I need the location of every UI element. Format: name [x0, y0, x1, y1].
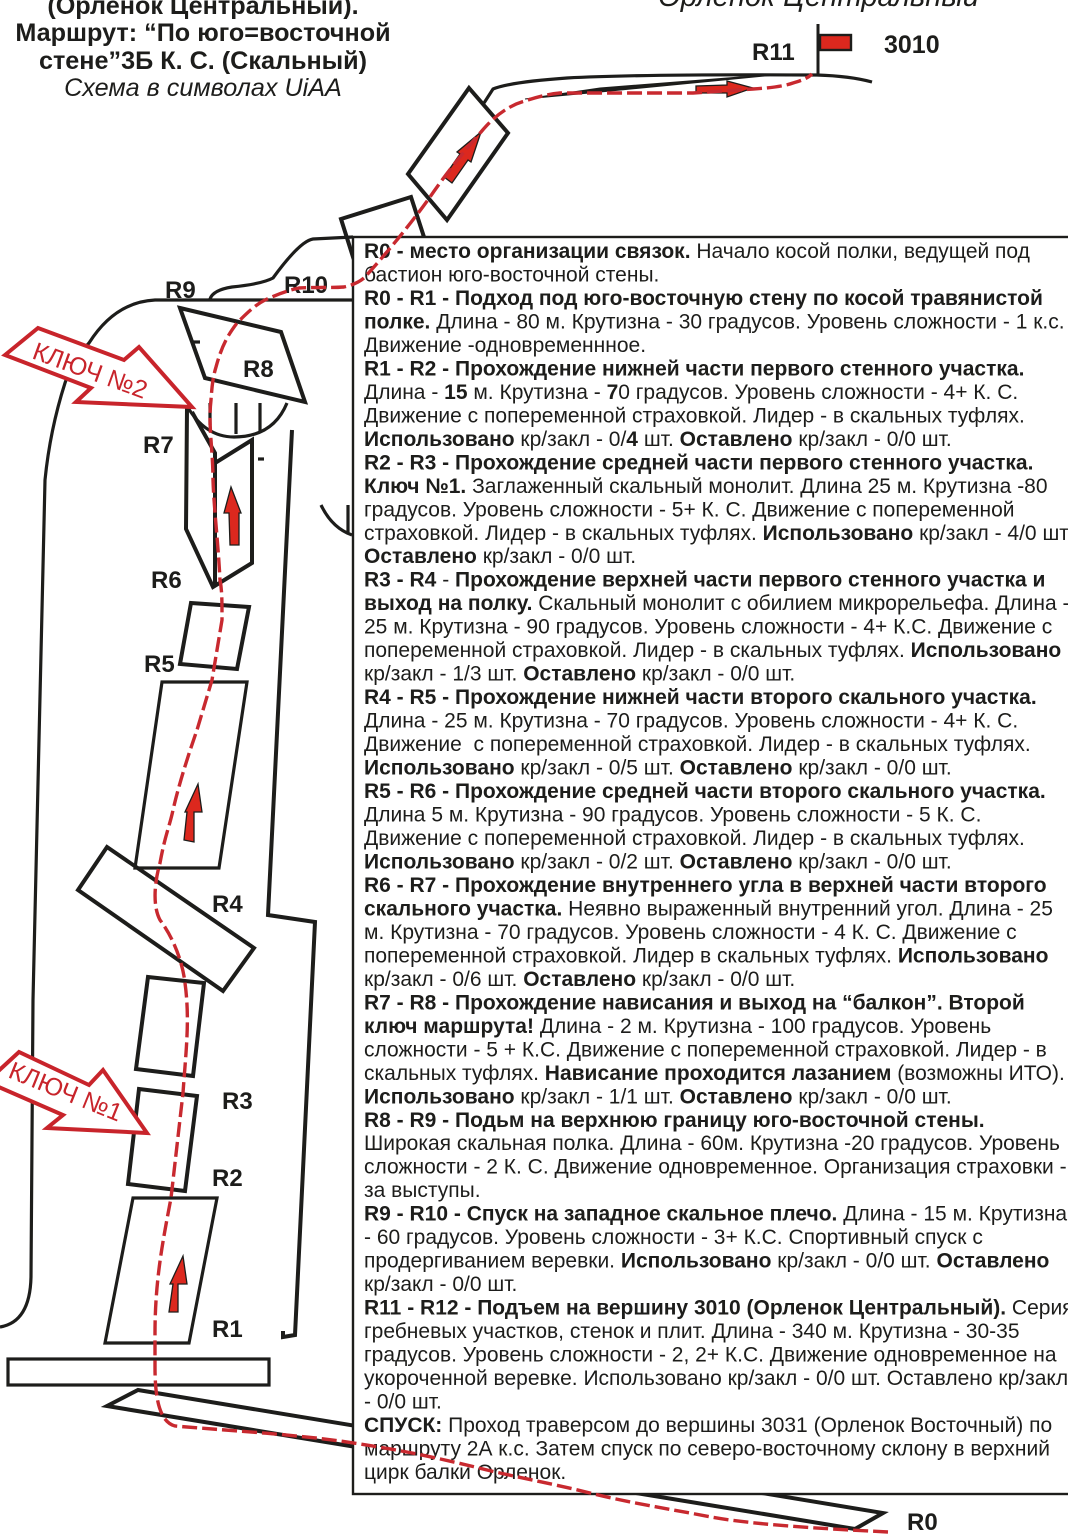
- section R8-R9: сложности - 2 К. С. Движение одновременное. Организация страховки -: [364, 1156, 1067, 1179]
- key 2 callout arrow: КЛЮЧ №2: [29, 337, 151, 405]
- section R0-R1: [364, 287, 1065, 357]
- section R2-R3: градусов. Уровень сложности - 5+ К. С. Движение с попеременной: [364, 498, 1014, 521]
- section R1-R2: [364, 357, 1025, 451]
- section R7-R8: Использовано кр/закл - 1/1 шт. Оставлено кр/закл - 0/0 шт.: [364, 1085, 952, 1108]
- section R9-R10: кр/закл - 0/0 шт.: [364, 1273, 517, 1296]
- section R3-R4: [364, 569, 1068, 686]
- section R9-R10: продергиванием веревки. Использовано кр/закл - 0/0 шт. Оставлено: [364, 1250, 1049, 1273]
- section R9-R10: R9 - R10 - Спуск на западное скальное плечо. Длина - 15 м. Крутизна: [364, 1203, 1067, 1226]
- section R6-R7: скального участка. Неявно выраженный внутренний угол. Длина - 25: [364, 897, 1053, 920]
- title: route heading: Схема в символах UiAA: [64, 74, 342, 102]
- section R6-R7: попеременной страховкой. Лидер в скальных туфлях. Использовано: [364, 944, 1048, 967]
- section R0-R1: R0 - R1 - Подход под юго-восточную стену по косой травянистой: [364, 287, 1043, 310]
- section R1-R2: Длина - 15 м. Крутизна - 70 градусов. Уровень сложности - 4+ К. С.: [364, 381, 1018, 404]
- section descent: маршруту 2А к.с. Затем спуск по северо-восточному склону в верхний: [364, 1438, 1050, 1460]
- section R0-R1: Движение -одновременнное.: [364, 334, 646, 357]
- pitch R1 wall: [105, 1198, 217, 1343]
- section R11-R12: - 0/0 шт.: [364, 1390, 442, 1414]
- title: route heading: [15, 0, 391, 102]
- climbing route: red dashed line: [155, 74, 888, 1532]
- section R9-R10: [364, 1203, 1067, 1296]
- section R7-R8: сложности - 5 + К.С. Движение с попеременной страховкой. Лидер - в: [364, 1038, 1047, 1061]
- belay station labels: [143, 31, 940, 1534]
- belay station labels: R11: [752, 39, 795, 66]
- pitch R2-R3 block: [128, 1089, 197, 1191]
- title: route heading: стене”3Б К. С. (Скальный): [39, 47, 367, 75]
- belay station labels: R3: [222, 1088, 253, 1115]
- title: route heading: Маршрут: “По юго=восточной: [15, 19, 391, 47]
- section R11-R12: [364, 1297, 1068, 1414]
- pitch R3 upper block: [136, 977, 204, 1076]
- section descent: [364, 1414, 1052, 1484]
- belay station labels: R9: [165, 277, 196, 304]
- section R1-R2: Использовано кр/закл - 0/4 шт. Оставлено кр/закл - 0/0 шт.: [364, 428, 952, 451]
- section R3-R4: выход на полку. Скальный монолит с обилием микрорельефа. Длина -: [364, 592, 1068, 615]
- section R5-R6: Использовано кр/закл - 0/2 шт. Оставлено кр/закл - 0/0 шт.: [364, 850, 952, 874]
- section R7-R8: ключ маршрута! Длина - 2 м. Крутизна - 100 градусов. Уровень: [364, 1015, 991, 1038]
- section R4-R5: Длина - 25 м. Крутизна - 70 градусов. Уровень сложности - 4+ К. С.: [364, 710, 1018, 733]
- section R11-R12: гребневых участков, стенок и плит. Длина - 340 м. Крутизна - 30-35: [364, 1320, 1020, 1343]
- section R7-R8: R7 - R8 - Прохождение нависания и выход на “балкон”. Второй: [364, 991, 1025, 1014]
- section R5-R6: Длина 5 м. Крутизна - 90 градусов. Уровень сложности - 5 К. С.: [364, 804, 981, 826]
- direction arrows: [169, 81, 753, 1312]
- section descent: цирк балки Орленок.: [364, 1461, 566, 1484]
- pitch R8 overhang block: [180, 308, 305, 402]
- base strip: [8, 1359, 269, 1385]
- pitch R6-R7 corner block: [186, 408, 264, 587]
- belay station labels: R2: [212, 1165, 243, 1192]
- section R1-R2: R1 - R2 - Прохождение нижней части первого стенного участка.: [364, 357, 1024, 380]
- key 1 callout arrow: КЛЮЧ №1: [5, 1057, 126, 1127]
- section R11-R12: градусов. Уровень сложности - 2, 2+ К.С. Движение одновременное на: [364, 1344, 1057, 1367]
- section R6-R7: м. Крутизна - 70 градусов. Уровень сложности - 4 К. С. Движение с: [364, 921, 1017, 944]
- belay station labels: R8: [243, 356, 274, 383]
- section R7-R8: [364, 991, 1065, 1108]
- section R6-R7: [364, 874, 1053, 991]
- section R0: [364, 240, 1030, 286]
- pitch R11 block: [408, 88, 508, 220]
- belay station labels: R6: [151, 567, 182, 594]
- belay station labels: R7: [143, 432, 174, 459]
- bottom ledge: [107, 1390, 883, 1529]
- pitch R4 ledge: [78, 847, 254, 991]
- section R8-R9: за выступы.: [364, 1179, 481, 1202]
- section R0: бастион юго-восточной стены.: [364, 264, 659, 286]
- panel text: route description: [364, 240, 1068, 1484]
- section R4-R5: Использовано кр/закл - 0/5 шт. Оставлено кр/закл - 0/0 шт.: [364, 757, 952, 780]
- section R7-R8: скальных туфлях. Нависание проходится лазанием (возможны ИТО).: [364, 1062, 1065, 1085]
- belay station labels: R1: [212, 1316, 243, 1343]
- section R8-R9: R8 - R9 - Подьм на верхнюю границу юго-восточной стены.: [364, 1109, 985, 1132]
- section R5-R6: Движение с попеременной страховкой. Лидер - в скальных туфлях.: [364, 827, 1025, 850]
- section R4-R5: R4 - R5 - Прохождение нижней части второго скального участка.: [364, 686, 1037, 709]
- section descent: СПУСК: Проход траверсом до вершины 3031 (Орленок Восточный) по: [364, 1414, 1052, 1437]
- section R2-R3: Ключ №1. Заглаженный скальный монолит. Длина 25 м. Крутизна -80: [364, 475, 1048, 498]
- section R0: R0 - место организации связок. Начало косой полки, ведущей под: [364, 240, 1030, 263]
- belay station labels: R10: [284, 272, 328, 299]
- section R11-R12: укороченной веревке. Использовано кр/закл - 0/0 шт. Оставлено кр/закл: [364, 1367, 1068, 1390]
- belay station labels: 3010: [884, 31, 940, 59]
- pitch R4-R5 wall: [135, 682, 247, 868]
- section R6-R7: кр/закл - 0/6 шт. Оставлено кр/закл - 0/0 шт.: [364, 968, 795, 991]
- section R4-R5: Движение с попеременной страховкой. Лидер - в скальных туфлях.: [364, 733, 1031, 756]
- pitch R10 block: [341, 197, 424, 257]
- mountain outline and walls: [0, 74, 872, 1337]
- section R5-R6: R5 - R6 - Прохождение средней части второго скального участка.: [364, 780, 1046, 803]
- section R3-R4: R3 - R4 - Прохождение верхней части первого стенного участка и: [364, 569, 1045, 592]
- section R2-R3: Оставлено кр/закл - 0/0 шт.: [364, 545, 636, 568]
- section R2-R3: страховкой. Лидер - в скальных туфлях. Использовано кр/закл - 4/0 шт.: [364, 522, 1068, 545]
- key 2 callout arrow: [5, 328, 192, 407]
- section R8-R9: Широкая скальная полка. Длина - 60м. Крутизна -20 градусов. Уровень: [364, 1132, 1060, 1155]
- belay station labels: R5: [144, 651, 175, 678]
- section R9-R10: - 60 градусов. Уровень сложности - 3+ К.С. Спортивный спуск с: [364, 1226, 983, 1249]
- belay station labels: R4: [212, 891, 243, 918]
- section R3-R4: 25 м. Крутизна - 90 градусов. Уровень сложности - 4+ К.С. Движение с: [364, 616, 1052, 639]
- pitch R5 block: [180, 603, 249, 669]
- section R2-R3: [364, 451, 1068, 568]
- section R3-R4: кр/закл - 1/3 шт. Оставлено кр/закл - 0/0 шт.: [364, 663, 795, 686]
- section R1-R2: Движение с попеременной страховкой. Лидер - в скальных туфлях.: [364, 404, 1025, 427]
- section R4-R5: [364, 686, 1037, 780]
- section R8-R9: [364, 1109, 1067, 1202]
- section R11-R12: R11 - R12 - Подъем на вершину 3010 (Орленок Центральный). Серия: [364, 1297, 1068, 1320]
- section R3-R4: попеременной страховкой. Лидер - в скальных туфлях. Использовано: [364, 639, 1061, 662]
- section R6-R7: R6 - R7 - Прохождение внутреннего угла в верхней части второго: [364, 874, 1047, 897]
- section R0-R1: полке. Длина - 80 м. Крутизна - 30 градусов. Уровень сложности - 1 к.с.: [364, 310, 1065, 333]
- flag icon: [818, 24, 851, 75]
- section R2-R3: R2 - R3 - Прохождение средней части первого стенного участка.: [364, 451, 1033, 474]
- panel: route description box: [353, 237, 1068, 1494]
- section R5-R6: [364, 780, 1046, 874]
